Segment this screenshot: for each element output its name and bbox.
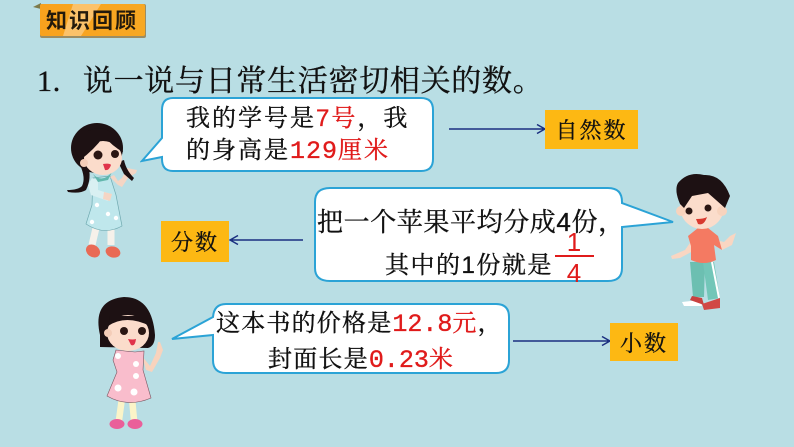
label: 分数 (161, 221, 229, 262)
label: 分数: 分数 (171, 230, 219, 255)
speech bubble 1: 我的学号是7号，我 (186, 105, 409, 132)
speech bubble 3: 封面长是0.23米 (268, 346, 454, 375)
arrow to 小数 (513, 336, 610, 346)
character: girl with braids (67, 123, 137, 258)
heading: question 1: 1. 说一说与日常生活密切相关的数。 (37, 65, 543, 98)
section tag: 知识回顾: 知识回顾 (46, 10, 138, 33)
character: boy (671, 174, 736, 310)
label: 自然数 (545, 110, 638, 149)
speech bubble 2: 把一个苹果平均分成4份， (317, 207, 625, 237)
speech bubble 2: 其中的1份就是 (385, 252, 553, 279)
arrow to 分数 (229, 234, 303, 246)
label: 小数 (610, 323, 678, 361)
label: 小数: 小数 (620, 330, 668, 356)
speech bubble 2 (314, 187, 674, 282)
speech bubble 1: 的身高是129厘米 (186, 137, 390, 166)
label: 自然数: 自然数 (555, 118, 628, 143)
speech bubble 3 (172, 303, 510, 375)
fraction: 1/4 (555, 228, 594, 282)
arrow to 自然数 (449, 124, 545, 134)
speech bubble 1 (140, 97, 434, 172)
character: girl in pink dress (98, 297, 163, 429)
speech bubble 3: 这本书的价格是12.8元， (216, 310, 503, 339)
section tag: 知识回顾 (33, 3, 146, 38)
